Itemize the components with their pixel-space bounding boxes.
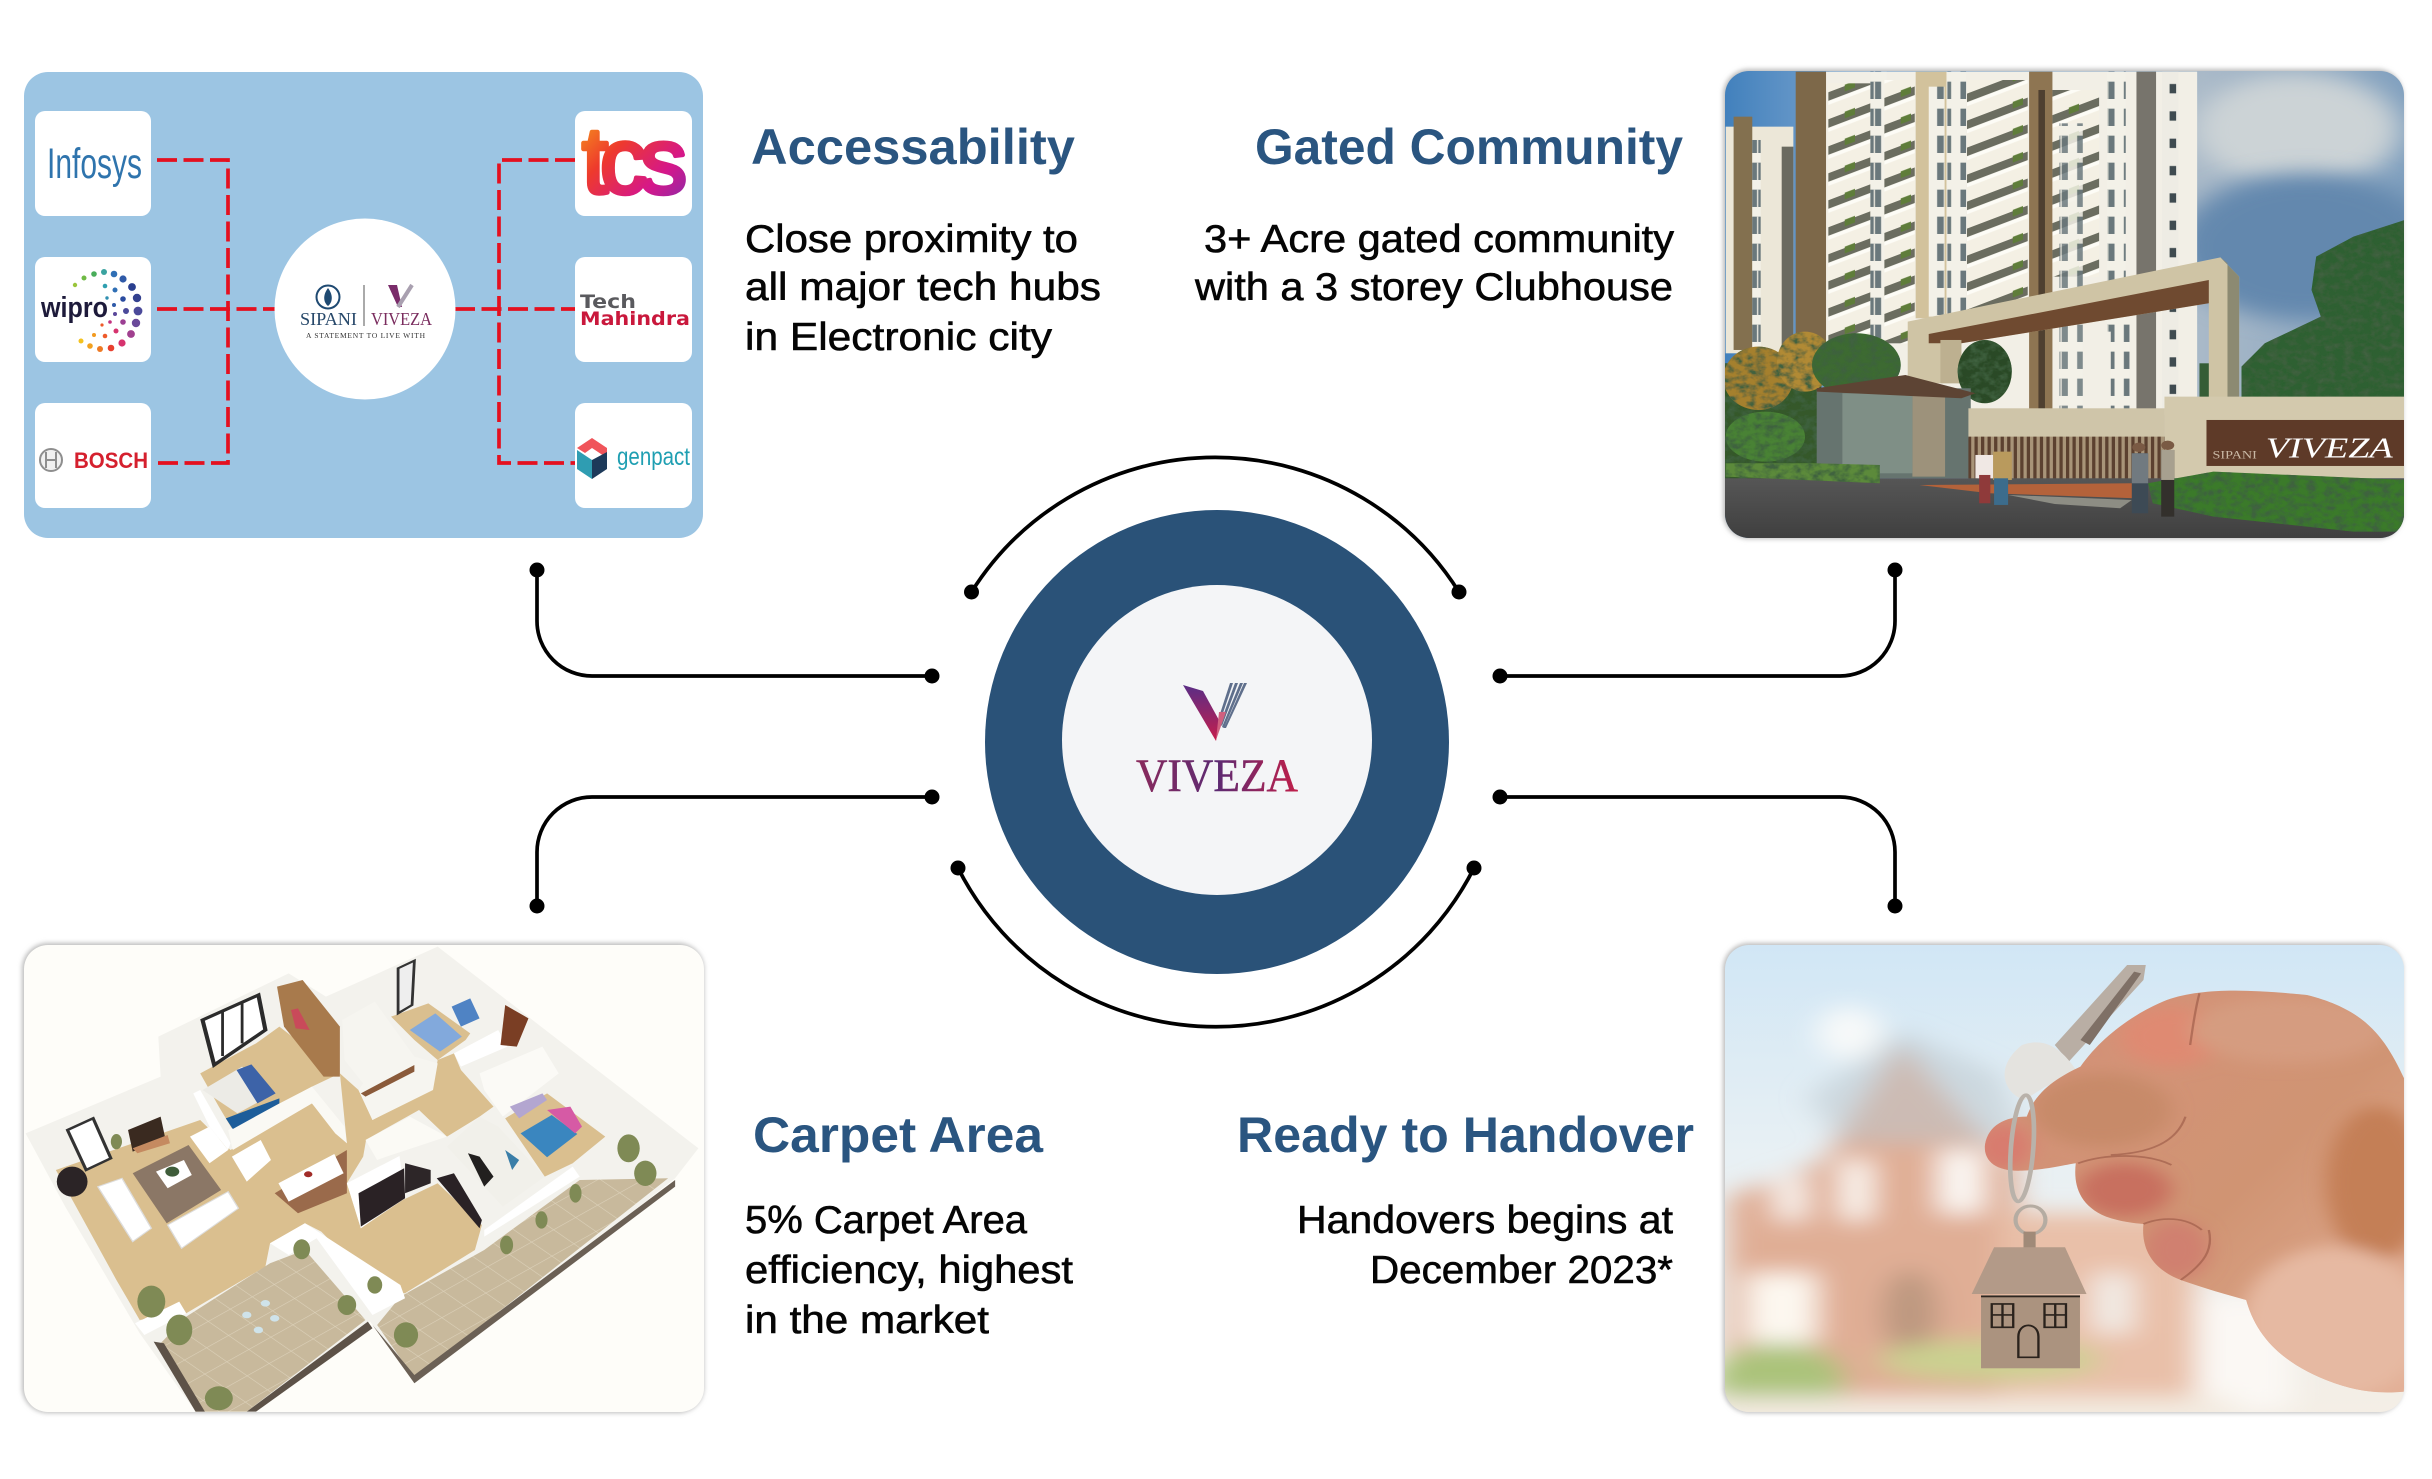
hand xyxy=(1975,987,2428,1400)
text: accessibility description: in Electronic city xyxy=(745,316,1053,359)
people xyxy=(2132,453,2148,513)
heading: Ready to Handover: Ready to Handover xyxy=(1237,1107,1694,1163)
panel: accessibility map xyxy=(24,72,703,538)
logo: genpact: genpact xyxy=(617,443,690,471)
text: carpet area description: efficiency, highest xyxy=(745,1249,1073,1292)
blurred house xyxy=(1714,1007,2293,1420)
panel: gated community photo: VIVEZA xyxy=(2266,432,2394,464)
left tower xyxy=(1726,127,1793,353)
windows xyxy=(203,995,265,1065)
living room xyxy=(133,1145,221,1223)
Viveza V mark xyxy=(1183,683,1247,741)
shrubs xyxy=(2148,472,2405,532)
logo: wipro: wipro xyxy=(40,292,108,324)
wardrobe xyxy=(277,980,340,1077)
panel: gated community photo xyxy=(1719,67,2432,543)
kitchen xyxy=(347,1156,405,1228)
logo: Sipani Viveza circle: SIPANI xyxy=(300,309,357,329)
dining xyxy=(275,1150,347,1213)
gatehouse xyxy=(1817,388,1971,478)
key xyxy=(2055,965,2146,1062)
connector: accessibility xyxy=(530,562,940,684)
red dashed connectors xyxy=(157,160,575,463)
panel: carpet area floor plan xyxy=(19,940,712,1417)
logo: Sipani Viveza circle: VIVEZA xyxy=(371,309,432,329)
trees xyxy=(1723,347,1793,410)
logo: tcs: tcs xyxy=(582,108,687,213)
center hub xyxy=(985,510,1449,974)
logo: Sipani Viveza circle: A STATEMENT TO LIVE WITH xyxy=(306,331,426,340)
interior walls xyxy=(228,1087,347,1150)
bottom arc xyxy=(950,860,1482,1027)
top arc xyxy=(964,457,1466,600)
walls xyxy=(1968,408,2164,438)
logo: Bosch xyxy=(35,403,151,508)
text: accessibility description: all major tech hubs xyxy=(745,266,1101,309)
outer ring xyxy=(985,510,1449,974)
text: carpet area description: 5% Carpet Area xyxy=(745,1199,1027,1242)
panel: gated community photo: SIPANI xyxy=(2213,448,2257,461)
text: carpet area description xyxy=(745,1199,1073,1342)
panel: ready to handover photo xyxy=(1714,940,2428,1420)
logo: Tech Mahindra: Tech xyxy=(580,291,636,313)
terraces xyxy=(161,1250,365,1412)
plants xyxy=(111,1134,656,1410)
floor xyxy=(56,1103,482,1320)
main tower xyxy=(1826,72,2197,415)
logo: Infosys: Infosys xyxy=(47,140,142,188)
text: accessibility description: Close proximity to xyxy=(745,218,1078,261)
logo: Sipani Viveza circle xyxy=(274,218,456,400)
connector: handover xyxy=(1492,790,1902,914)
heading: Accessability: Accessability xyxy=(751,119,1075,175)
text: handover description: December 2023* xyxy=(1370,1249,1673,1292)
gate frame xyxy=(1908,257,2239,405)
beds xyxy=(208,1066,257,1114)
text: carpet area description: in the market xyxy=(745,1299,989,1342)
sign xyxy=(2206,420,2405,466)
text: gated community description xyxy=(1194,218,1675,309)
logo: Bosch: BOSCH xyxy=(74,448,148,473)
background greenery xyxy=(1723,363,1821,480)
inner circle xyxy=(1062,585,1372,895)
text: handover description xyxy=(1297,1199,1673,1292)
logo: Tech Mahindra xyxy=(575,257,692,362)
connector: carpet area xyxy=(530,790,940,914)
logo: wipro xyxy=(35,257,151,362)
heading: Gated Community: Gated Community xyxy=(1255,119,1683,175)
text: gated community description: 3+ Acre gated community xyxy=(1204,218,1675,261)
logo: genpact xyxy=(575,403,692,508)
road xyxy=(1719,478,2410,542)
logo: Infosys xyxy=(35,111,151,216)
key ring and fob xyxy=(2007,1095,2037,1202)
connector: gated community xyxy=(1492,562,1902,684)
Viveza wordmark: VIVEZA xyxy=(1136,750,1298,802)
heading: Carpet Area: Carpet Area xyxy=(753,1107,1044,1163)
logo: Tech Mahindra: Mahindra xyxy=(580,308,690,330)
walls shell xyxy=(26,947,698,1412)
text: handover description: Handovers begins at xyxy=(1297,1199,1673,1242)
text: accessibility description xyxy=(745,218,1101,359)
text: gated community description: with a 3 storey Clubhouse xyxy=(1194,266,1673,309)
